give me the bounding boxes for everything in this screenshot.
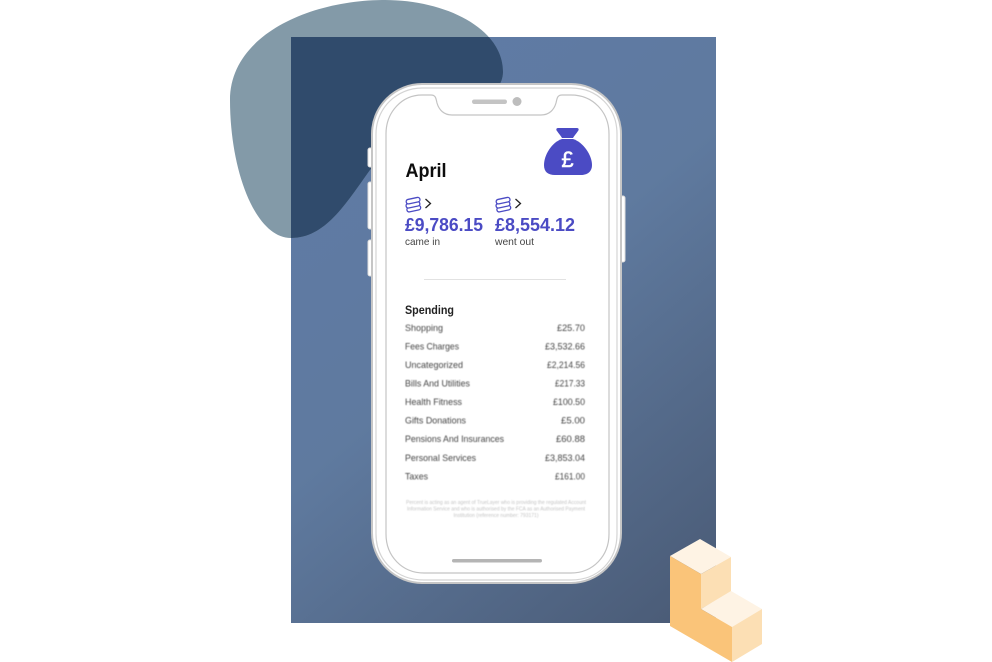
row: Fees Charges: £3,532.66	[545, 342, 585, 352]
label: went out: went out	[494, 236, 534, 248]
disclaimer	[406, 500, 587, 519]
came in block	[405, 197, 483, 248]
heading: Spending: Spending	[405, 305, 454, 317]
disclaimer: Percent is acting as an agent of TrueLayer who is providing the regulated Account	[406, 500, 587, 506]
icon: stacked blocks	[670, 539, 762, 662]
amount: came in: £9,786.15	[405, 215, 483, 235]
row: Fees Charges	[405, 342, 585, 352]
row: Health Fitness	[405, 397, 585, 408]
row: Shopping: Shopping	[405, 323, 443, 334]
row: Taxes: £161.00	[555, 472, 585, 482]
icon: coins in	[405, 197, 422, 212]
decorative blob	[230, 0, 503, 238]
phone side buttons	[368, 148, 625, 276]
spending list	[405, 323, 585, 482]
heading: April: April	[406, 160, 446, 182]
camera	[512, 97, 522, 106]
went out block	[494, 197, 575, 248]
disclaimer: Institution (reference number: 793171)	[454, 513, 539, 519]
row: Uncategorized: £2,214.56	[547, 360, 585, 371]
row: Pensions And Insurances: Pensions And Insurances	[405, 434, 504, 445]
row: Bills And Utilities: £217.33	[555, 378, 585, 390]
row: Taxes	[405, 472, 585, 482]
row: Shopping	[405, 323, 585, 334]
amount: went out: £8,554.12	[495, 215, 575, 235]
speaker	[472, 100, 507, 104]
icon: coins out	[495, 197, 512, 212]
row: Pensions And Insurances	[405, 434, 585, 445]
row: Gifts Donations	[405, 416, 585, 426]
row: Uncategorized	[405, 360, 585, 371]
label: came in: came in	[405, 236, 440, 248]
row: Gifts Donations: £5.00	[561, 416, 585, 426]
background panel	[291, 37, 716, 623]
row: Bills And Utilities	[405, 378, 585, 390]
row: Pensions And Insurances: £60.88	[556, 434, 585, 445]
disclaimer: Information Service and who is authorised by the FCA as an Authorised Payment	[407, 506, 586, 512]
infographic canvas	[230, 0, 762, 662]
row: Uncategorized: Uncategorized	[405, 360, 463, 371]
phone screen	[386, 95, 609, 573]
arrow: came in	[426, 199, 430, 208]
row: Health Fitness: £100.50	[553, 397, 585, 408]
icon: money bag	[544, 128, 592, 175]
row: Taxes: Taxes	[405, 472, 428, 482]
row: Gifts Donations: Gifts Donations	[405, 416, 466, 426]
row: Personal Services: £3,853.04	[545, 453, 585, 464]
row: Bills And Utilities: Bills And Utilities	[405, 378, 470, 390]
row: Personal Services	[405, 453, 585, 464]
row: Health Fitness: Health Fitness	[405, 397, 462, 408]
row: Personal Services: Personal Services	[405, 453, 476, 464]
phone body	[372, 84, 621, 583]
home indicator	[452, 559, 542, 562]
arrow: went out	[516, 199, 520, 208]
pound sign: £	[561, 147, 574, 172]
phone	[368, 84, 625, 583]
row: Shopping: £25.70	[557, 323, 585, 334]
row: Fees Charges: Fees Charges	[405, 342, 459, 352]
divider line	[424, 279, 566, 280]
